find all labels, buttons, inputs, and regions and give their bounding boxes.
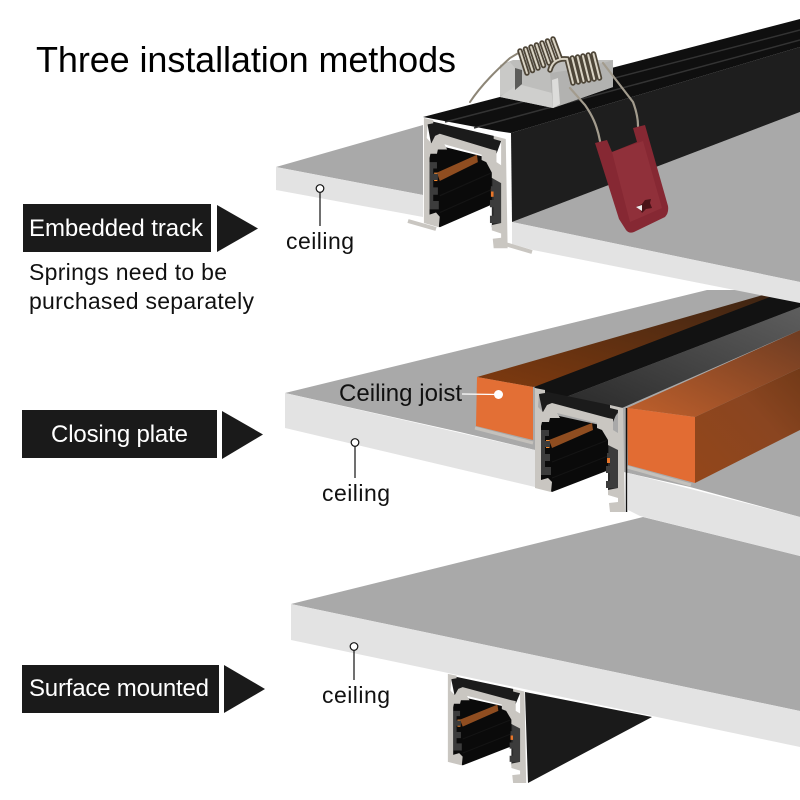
surface plate side face [291, 604, 800, 747]
callout: ceiling joist: Ceiling joist [339, 380, 462, 407]
closing plate track [534, 297, 800, 512]
surface plate top face [291, 517, 800, 711]
embedded plate left side face [276, 167, 423, 217]
surface mounted track [448, 674, 652, 783]
callout: ceiling 3: ceiling [322, 682, 390, 708]
ceiling joist right [627, 330, 800, 485]
callout: ceiling 1: ceiling [286, 228, 354, 254]
springs [470, 39, 638, 141]
red clip [595, 125, 668, 233]
ceiling joist left [475, 295, 790, 443]
callout: ceiling 1 [286, 185, 354, 254]
note: springs [29, 259, 254, 314]
panel: surface mounted ceiling plate and track [291, 517, 800, 783]
panel: embedded track ceiling and spring clip [276, 19, 800, 303]
label: surface mounted [22, 665, 219, 713]
label: embedded track: Embedded track [29, 215, 204, 242]
callout: ceiling 2 [322, 439, 390, 506]
label: embedded track [23, 204, 211, 252]
closing plate top face [285, 290, 800, 517]
callout: ceiling 2: ceiling [322, 480, 390, 506]
label: closing plate [22, 410, 217, 458]
label: closing plate: Closing plate [51, 421, 188, 448]
closing plate side face right [628, 473, 800, 556]
panel: closing plate ceiling with joists [285, 290, 800, 556]
closing plate side face left [285, 393, 535, 487]
arrow: closing plate [222, 411, 263, 459]
embedded plate left top face [276, 125, 423, 195]
note: springs: Springs need to be [29, 259, 227, 285]
embedded plate right side face [512, 222, 800, 303]
label: surface mounted: Surface mounted [29, 675, 209, 702]
callout: ceiling 3 [322, 643, 390, 708]
arrow: surface mounted [224, 665, 265, 713]
embedded track [408, 19, 800, 252]
embedded plate right top face [512, 112, 800, 282]
title: Three installation methods [36, 39, 456, 80]
arrow: embedded track [217, 205, 258, 252]
track flanges [408, 221, 532, 252]
note: springs: purchased separately [29, 288, 254, 314]
spring mounting bracket [500, 60, 613, 108]
